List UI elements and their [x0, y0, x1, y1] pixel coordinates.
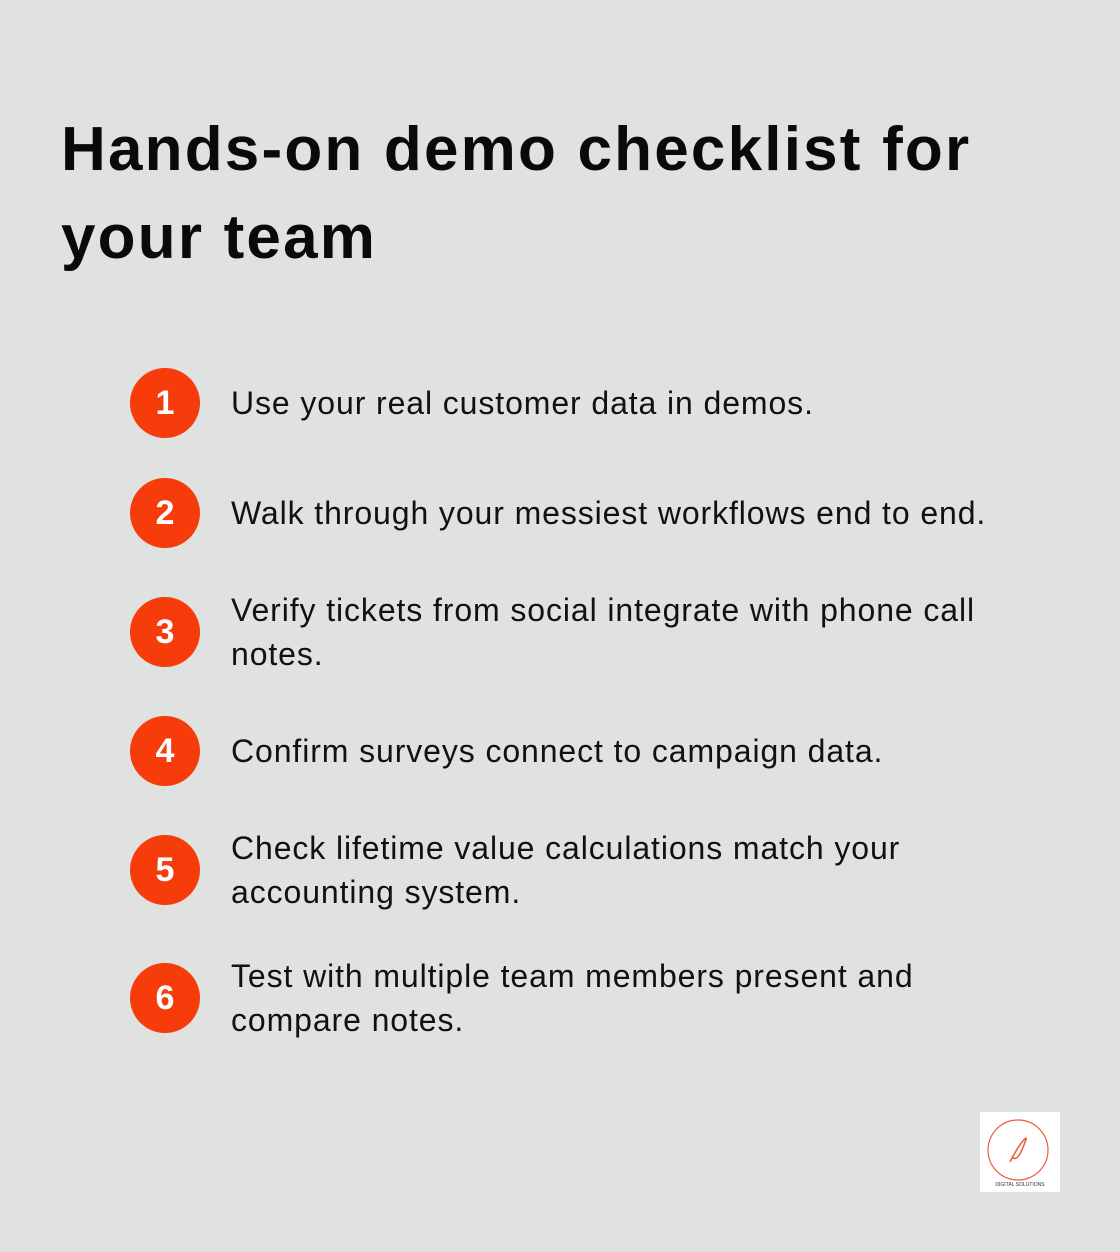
title	[61, 115, 971, 272]
text 3	[231, 592, 975, 672]
badge 2: 2	[156, 494, 174, 532]
badge 5	[130, 835, 200, 905]
item 6	[130, 958, 914, 1038]
text 3: Verify tickets from social integrate with phone call	[231, 592, 975, 628]
text 4: Confirm surveys connect to campaign data.	[231, 733, 883, 769]
item 4	[130, 716, 883, 786]
badge 2	[130, 478, 200, 548]
logo	[980, 1112, 1060, 1192]
logo: DIGITAL SOLUTIONS	[995, 1182, 1045, 1188]
badge 3: 3	[156, 613, 174, 651]
title: Hands-on demo checklist for	[61, 115, 971, 184]
badge 4: 4	[156, 732, 174, 770]
text 5	[231, 830, 900, 910]
text 6: Test with multiple team members present and	[231, 958, 914, 994]
badge 6: 6	[156, 979, 174, 1017]
text 5: accounting system.	[231, 874, 521, 910]
badge 3	[130, 597, 200, 667]
item 3	[130, 592, 975, 672]
text 6	[231, 958, 914, 1038]
text 6: compare notes.	[231, 1002, 464, 1038]
badge 5: 5	[156, 851, 174, 889]
text 2: Walk through your messiest workflows end to end.	[231, 495, 986, 531]
item 2	[130, 478, 986, 548]
text 5: Check lifetime value calculations match your	[231, 830, 900, 866]
item 5	[130, 830, 900, 910]
text 1: Use your real customer data in demos.	[231, 385, 814, 421]
badge 6	[130, 963, 200, 1033]
title: your team	[61, 203, 377, 272]
badge 4	[130, 716, 200, 786]
text 3: notes.	[231, 636, 324, 672]
badge 1: 1	[156, 384, 174, 422]
item 1	[130, 368, 814, 438]
badge 1	[130, 368, 200, 438]
